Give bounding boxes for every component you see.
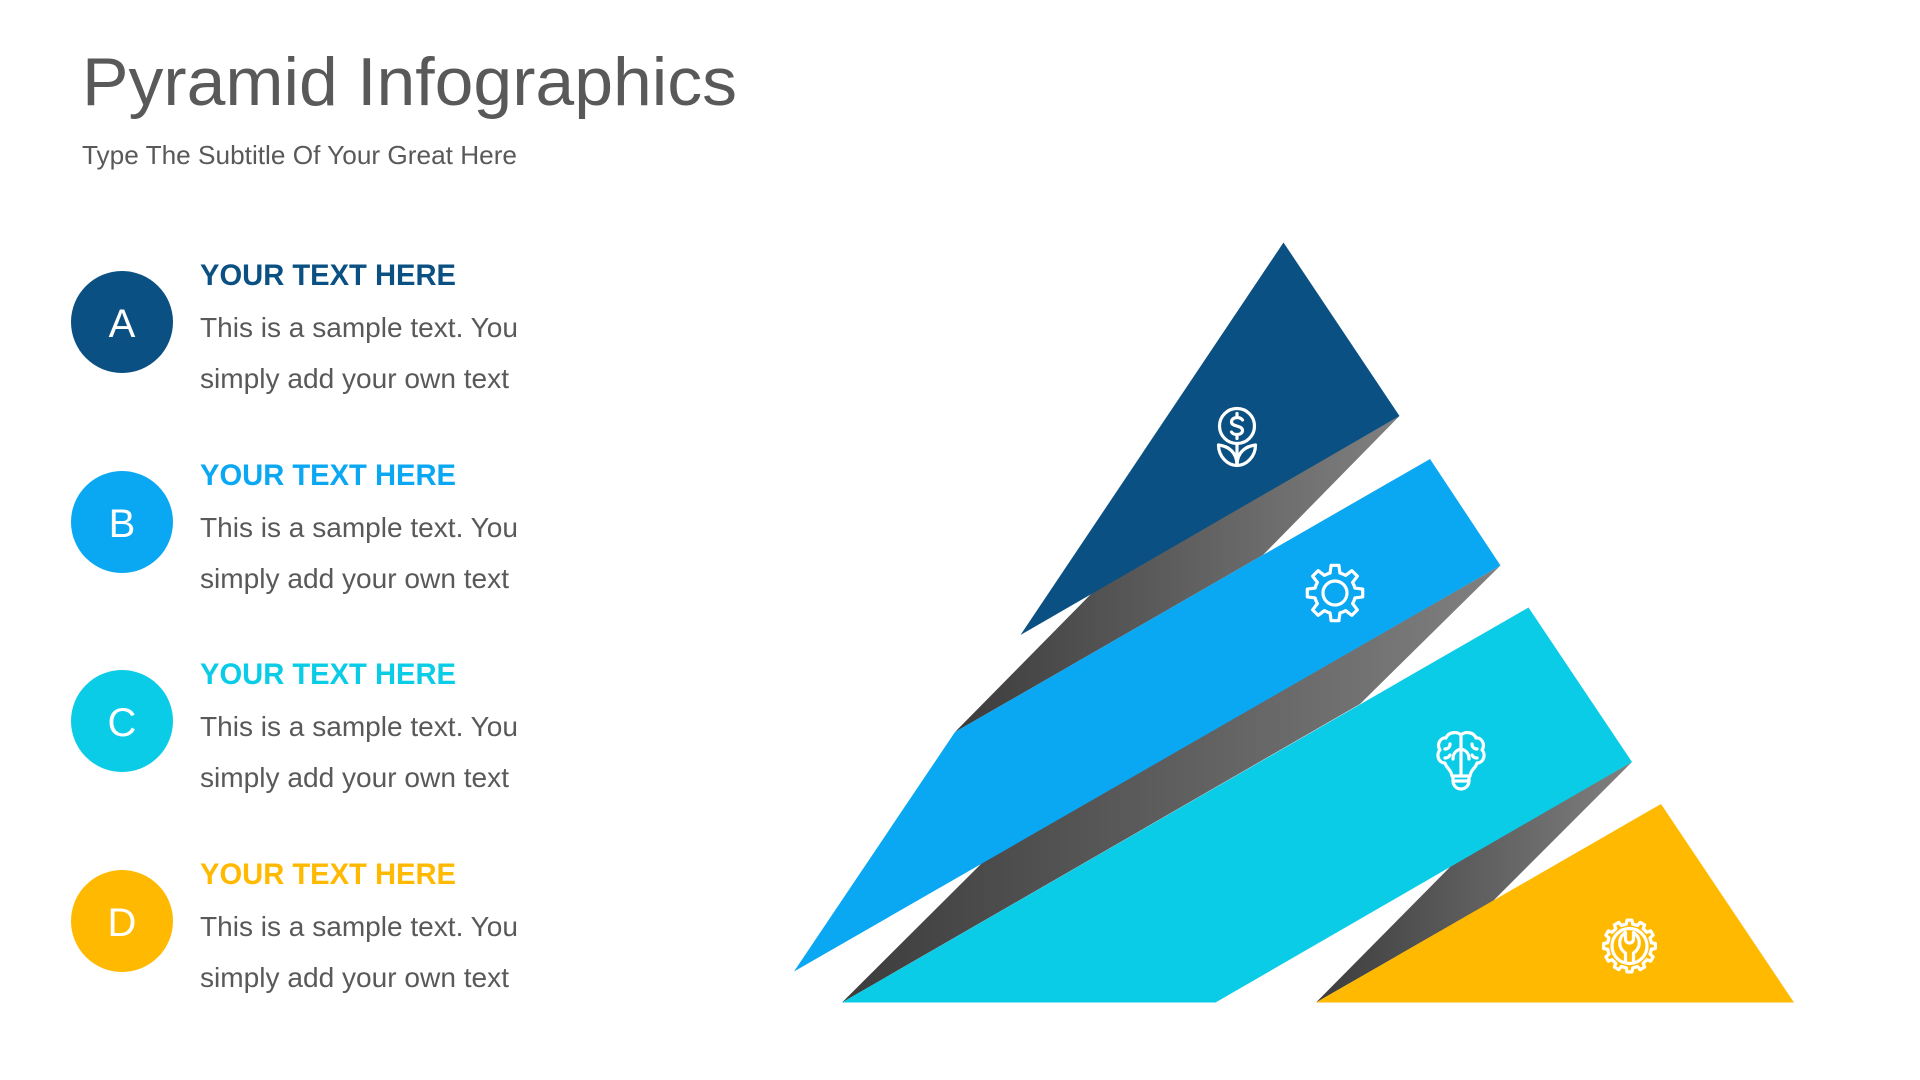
- badge A: A: [109, 302, 136, 346]
- icon: brain bulb: [1438, 733, 1484, 789]
- pyramid chart: [794, 242, 1794, 1002]
- tier A: dark blue: [1020, 242, 1400, 635]
- body text B: This is a sample text. You: [200, 512, 518, 543]
- body text D: [200, 911, 518, 993]
- icon: wrench gear: [1604, 920, 1655, 972]
- icon: money flower: [1218, 408, 1256, 466]
- body text D: This is a sample text. You: [200, 911, 518, 942]
- fold shadow between tiers C and D: [1316, 762, 1632, 1002]
- body text C: simply add your own text: [200, 762, 509, 793]
- badge C: [71, 670, 173, 772]
- subtitle: Type The Subtitle Of Your Great Here: [82, 140, 517, 170]
- body text A: This is a sample text. You: [200, 312, 518, 343]
- body text A: [200, 312, 518, 394]
- heading A: YOUR TEXT HERE: [200, 259, 456, 292]
- list item C: [71, 658, 518, 793]
- heading D: YOUR TEXT HERE: [200, 858, 456, 891]
- body text B: [200, 512, 518, 594]
- body text D: simply add your own text: [200, 962, 509, 993]
- body text C: This is a sample text. You: [200, 711, 518, 742]
- tier D: yellow: [1316, 804, 1794, 1002]
- badge A: [71, 271, 173, 373]
- badge B: [71, 471, 173, 573]
- fold shadow between tiers B and C: [842, 566, 1500, 1002]
- tier C: cyan: [842, 608, 1632, 1002]
- list item A: [71, 259, 518, 394]
- badge C: C: [108, 701, 136, 745]
- icon: gear: [1307, 565, 1363, 621]
- list item B: [71, 459, 518, 594]
- badge D: D: [108, 901, 136, 945]
- body text A: simply add your own text: [200, 363, 509, 394]
- title: Pyramid Infographics: [82, 44, 737, 120]
- body text B: simply add your own text: [200, 563, 509, 594]
- list item D: [71, 858, 518, 993]
- body text C: [200, 711, 518, 793]
- badge B: B: [109, 502, 135, 546]
- fold shadow between tiers A and B: [955, 416, 1400, 732]
- tier B: blue: [794, 459, 1500, 972]
- badge D: [71, 870, 173, 972]
- heading B: YOUR TEXT HERE: [200, 459, 456, 492]
- heading C: YOUR TEXT HERE: [200, 658, 456, 691]
